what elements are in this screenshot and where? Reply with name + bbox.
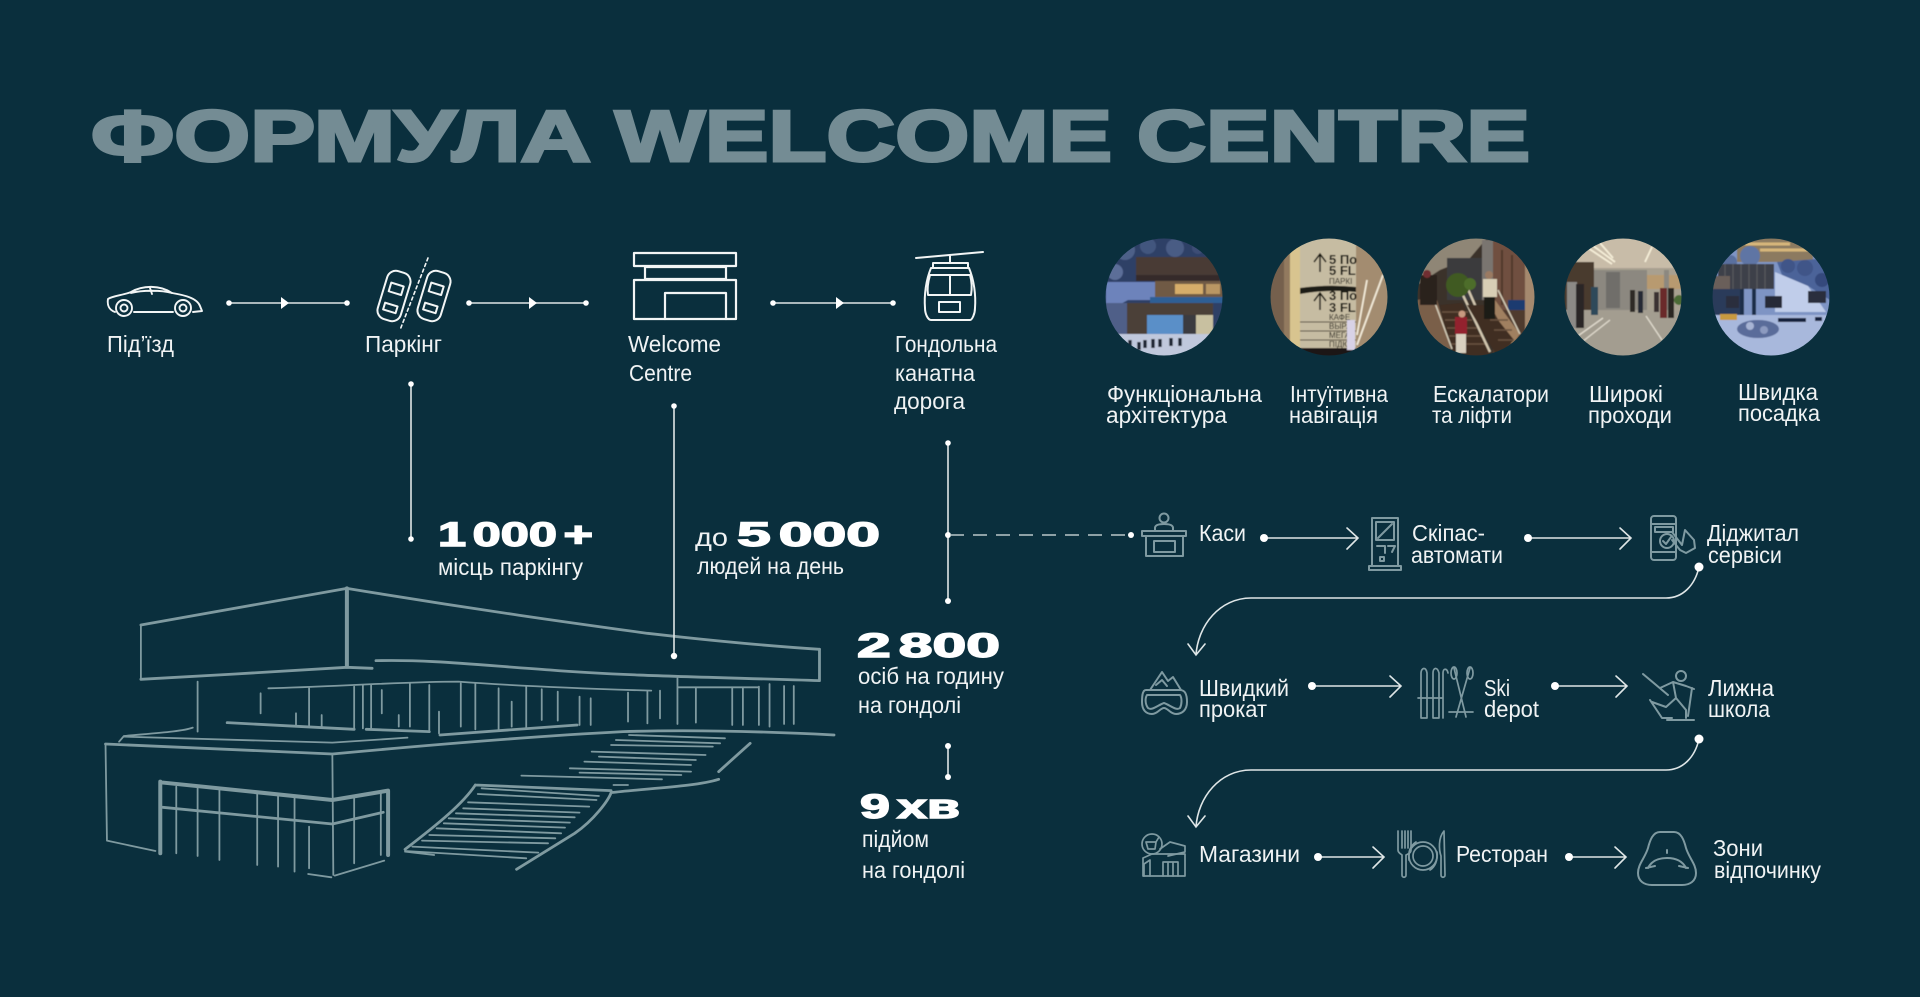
connector: welcome centre [671,403,677,659]
photo: intuitive navigation: 5 По [1329,252,1357,267]
photo: intuitive navigation: КАФЕ [1329,313,1350,322]
icon: car [108,287,202,316]
text: photo captions: архітектура [1106,402,1227,428]
photo: intuitive navigation: 5 FL [1329,263,1356,278]
photo: intuitive navigation: МЕГА [1329,331,1351,340]
text: ski depot [1484,675,1540,722]
title: ФОРМУЛА [91,97,591,177]
stat: ride time [860,788,965,883]
icon: ski pass kiosk [1369,518,1401,570]
text: photo captions: Ескалатори [1433,381,1549,407]
stat: people per day: 5 000 [737,516,880,554]
text: gondola: канатна [895,360,975,386]
arrow: arrival to parking [226,297,350,309]
icon: welcome centre building [634,253,736,319]
photo: intuitive navigation: ПІДЮ [1329,340,1350,349]
icon: ski depot [1418,667,1473,718]
text: digital services [1707,520,1799,568]
panel: arrival flow [107,252,997,414]
text: photo captions: посадка [1738,400,1820,426]
text: fast rental: Швидкий [1199,675,1289,701]
title [91,97,1530,177]
stat: gondola capacity [857,627,1004,718]
text: welcome centre: Welcome [628,331,721,357]
text: photo captions: Функціональна [1107,381,1262,407]
text: photo captions: проходи [1588,402,1672,428]
stat: gondola capacity: на гондолі [858,692,961,718]
illustration: building sketch [106,588,834,877]
text: ski pass machines [1411,520,1503,568]
stat: ride time: на гондолі [862,857,965,883]
text: digital services: Діджитал [1707,520,1799,546]
text: photo captions: навігація [1289,402,1378,428]
connector: gondola ride [945,743,951,780]
arrow: row 1 to row 2 [1188,562,1704,655]
icon: parked cars [375,258,453,330]
text: welcome centre: Centre [629,360,692,386]
text: rest areas: Зони [1713,835,1763,861]
text: rest areas [1713,835,1821,883]
stat: ride time: підйом [862,826,929,852]
text: ticket offices: Каси [1199,520,1246,546]
stat: ride time: 9 хв [860,788,960,826]
stat: gondola capacity: 2 800 [857,627,1000,665]
text: gondola: Гондольна [895,331,997,357]
connector: parking [408,381,414,542]
text: gondola: дорога [894,388,965,414]
text: photo captions: Швидка [1738,379,1818,405]
arrow [1260,528,1358,549]
stat: gondola capacity: осіб на годину [858,663,1004,689]
text: arrival: Під’їзд [107,331,175,357]
photo: functional architecture [1106,238,1222,356]
text: gondola [894,331,997,414]
arrow [1551,676,1627,697]
text: welcome centre [628,331,721,386]
text: fast rental [1199,675,1289,722]
arrow: row 2 to row 3 [1188,734,1704,827]
text: fast rental: прокат [1199,696,1267,722]
icon: restaurant [1398,831,1445,877]
text: ski school: школа [1708,696,1770,722]
text: photo captions: Інтуїтивна [1290,381,1388,407]
arrow [1565,847,1626,868]
text: photo captions [1106,379,1820,428]
connector: gondola [945,440,1134,604]
arrow [1524,528,1631,549]
text: ski pass machines: Скіпас- [1412,520,1485,546]
title: CENTRE [1137,97,1530,177]
photo: escalators and lifts [1417,238,1537,358]
stat: people per day: людей на день [697,553,844,579]
icon: ticket desk [1142,514,1186,556]
text: parking: Паркінг [365,331,442,357]
text: ski school [1708,675,1774,722]
text: photo captions: Широкі [1589,381,1663,407]
icon: gondola [916,252,983,320]
arrow [1314,847,1384,868]
icon: shops [1142,834,1185,876]
stat: parking spaces [438,516,593,580]
text: ski depot: Ski [1484,675,1510,701]
text: digital services: сервіси [1708,542,1782,568]
icon: bean bag [1638,832,1696,885]
text: restaurant: Ресторан [1456,841,1548,867]
panel: photo features [1100,232,1830,428]
arrow: welcome centre to gondola [770,297,896,309]
text: ski depot: depot [1484,696,1540,722]
photo: intuitive navigation: ПАРКІ [1329,277,1352,286]
title: WELCOME [615,97,1112,177]
photo: fast boarding [1712,238,1830,358]
panel: service flow [1142,514,1821,885]
stat: people per day: до [695,524,728,552]
text: ski pass machines: автомати [1411,542,1503,568]
icon: digital services [1651,516,1695,560]
photo: wide passages [1564,238,1684,358]
icon: ski school [1643,671,1694,720]
stat: parking spaces: місць паркінгу [438,554,583,580]
photo: intuitive navigation [1270,238,1389,356]
text: shops: Магазини [1199,841,1300,867]
icon: goggles and mountains [1142,672,1187,714]
photo: intuitive navigation: 3 FL [1329,300,1356,315]
stat: parking spaces: 1 000 + [438,516,593,554]
text: photo captions: та ліфти [1432,402,1512,428]
text: rest areas: відпочинку [1714,857,1821,883]
arrow [1308,676,1401,697]
photo: intuitive navigation: ВЫРА [1329,322,1352,331]
text: ski school: Лижна [1708,675,1774,701]
photo: intuitive navigation: 3 По [1329,288,1357,303]
stat: people per day [695,516,880,579]
arrow: parking to welcome centre [466,297,589,309]
